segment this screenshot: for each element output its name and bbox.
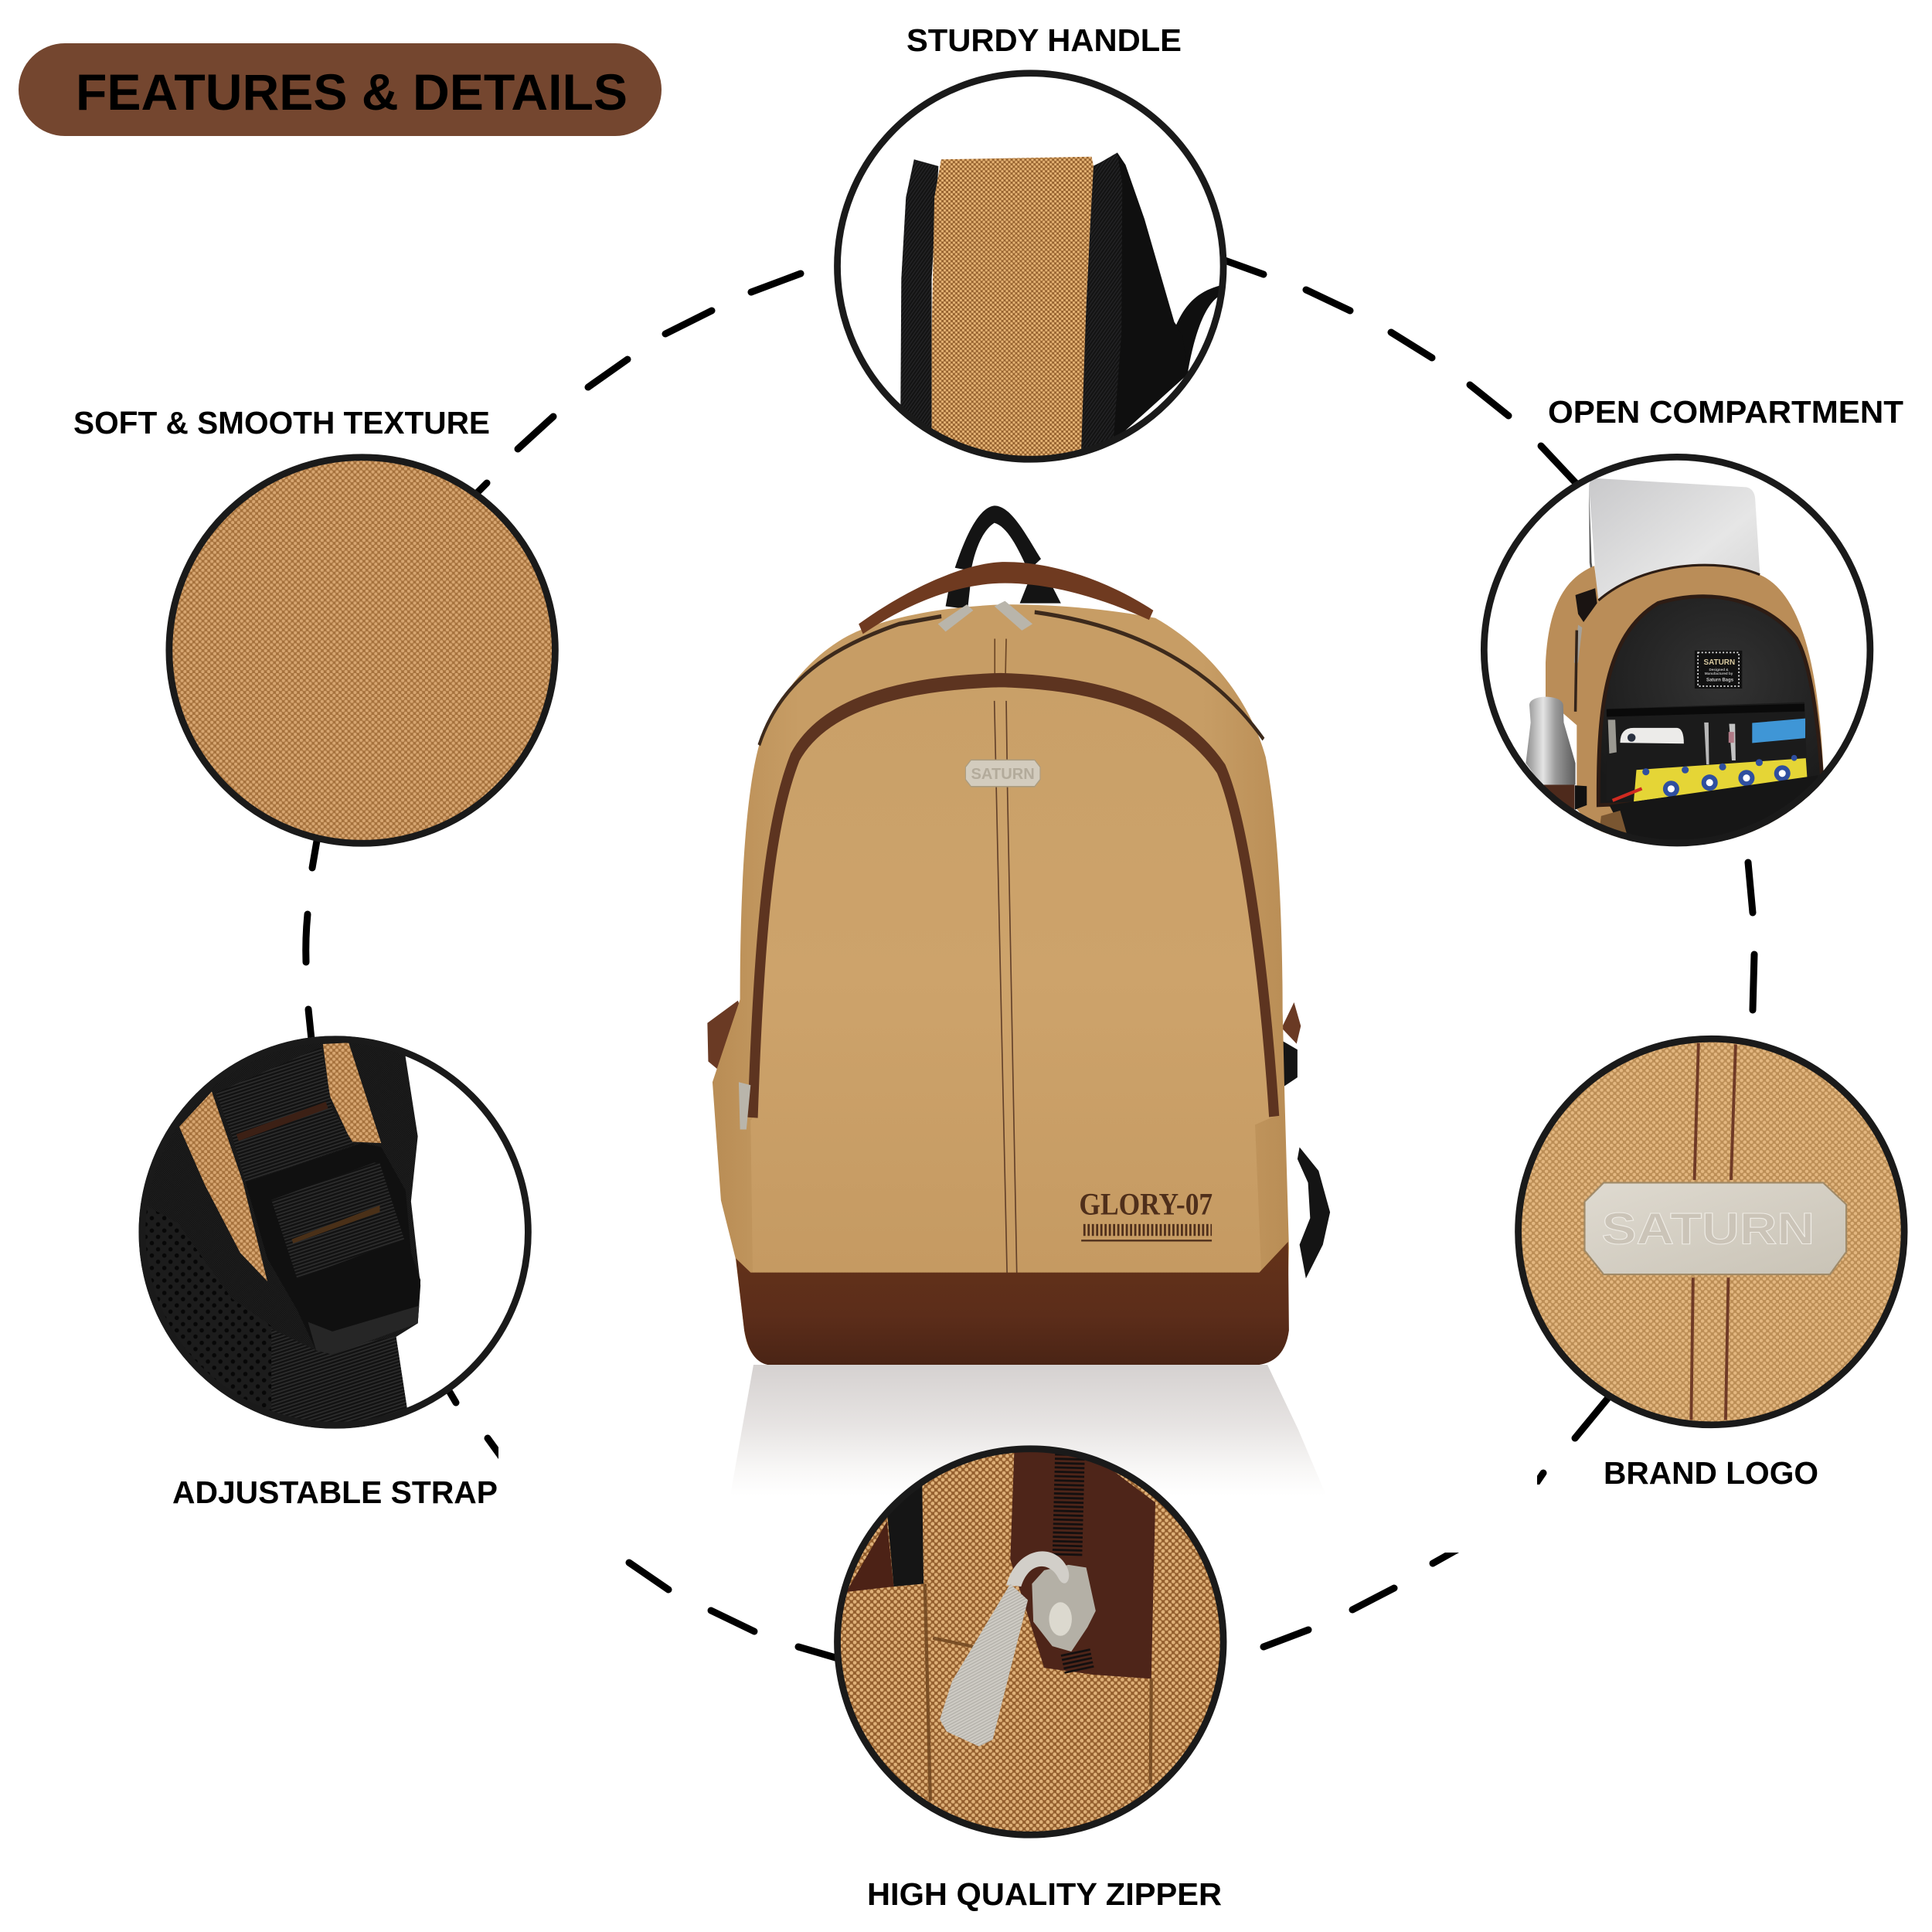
seam shadows [925, 1583, 1151, 1801]
side pocket left [707, 1001, 750, 1088]
label: adjustable strap: ADJUSTABLE STRAP [172, 1475, 498, 1510]
front panel [750, 680, 1274, 1274]
circle: high quality zipper [834, 1446, 1226, 1838]
label: sturdy handle: STURDY HANDLE [906, 22, 1182, 58]
webbing upper [216, 1047, 354, 1182]
phone [1620, 728, 1684, 743]
brand plate: SATURN [971, 764, 1035, 782]
circle: soft and smooth texture [166, 454, 559, 846]
circle: sturdy handle detail [834, 70, 1226, 463]
tan fabric edge right [323, 1043, 381, 1143]
zipper pull [1608, 719, 1617, 753]
interior brand label: Manufactured by [1705, 672, 1733, 675]
interior brand label: SATURN [1703, 658, 1735, 667]
upper rim trim [1598, 565, 1760, 600]
zipper teeth [1067, 1454, 1080, 1671]
interior brand label [1695, 651, 1742, 689]
brand plate [965, 760, 1040, 787]
icon: back strap right [1298, 1147, 1330, 1278]
label: soft and smooth texture: SOFT & SMOOTH TEXTURE [73, 405, 490, 440]
ventilated mesh [134, 1202, 271, 1434]
handle side webbing right [1080, 153, 1122, 461]
bag outer shell [1546, 565, 1824, 839]
glory-07 print: GLORY-07 [1079, 1188, 1213, 1222]
interior brand label: Saturn Bags [1706, 679, 1734, 683]
laptop [1589, 478, 1760, 599]
black strap piece [887, 1484, 923, 1587]
plate lettering: SATURN [1602, 1204, 1815, 1253]
handle side webbing left [900, 159, 938, 447]
top zipper seam [759, 612, 1264, 745]
interior lining [1598, 597, 1822, 805]
side zipper pull [1574, 625, 1582, 663]
zipper pull tab [940, 1583, 1028, 1747]
yellow pencil case [1634, 755, 1807, 801]
central backpack product illustration [707, 505, 1330, 1365]
circle: brand logo [1515, 1036, 1907, 1428]
title text: FEATURES & DETAILS [76, 63, 628, 121]
brown stitching [237, 1105, 327, 1138]
stitching [1691, 1043, 1736, 1420]
handle rear panel [1093, 153, 1189, 457]
blue box [1752, 719, 1805, 743]
panel zipper piping [753, 680, 1274, 1117]
lower gusset [1598, 811, 1628, 839]
small strap loop [1176, 286, 1219, 371]
product floor reflection [730, 1365, 1326, 1495]
label: brand logo: BRAND LOGO [1604, 1455, 1818, 1491]
metal plate [1585, 1182, 1846, 1274]
handle fabric strip [932, 157, 1094, 463]
zipper slider [1006, 1551, 1096, 1651]
label: open compartment: OPEN COMPARTMENT [1548, 394, 1903, 430]
dashed connector ring [306, 260, 1754, 1659]
padded black strap [139, 1036, 420, 1428]
zipper pulls [938, 601, 1032, 631]
pens [1704, 723, 1736, 764]
top carry loop [946, 505, 1061, 609]
inner organiser pocket [1634, 702, 1805, 765]
side opening [1576, 588, 1597, 622]
leather corner [1542, 785, 1575, 812]
side pocket right [1275, 1002, 1301, 1094]
interior brand label: Designed & [1709, 668, 1729, 672]
circle: open compartment [1481, 454, 1873, 846]
top carry handle [859, 562, 1153, 634]
red ribbon [1613, 788, 1642, 801]
bag body [713, 604, 1289, 1364]
leather base [736, 1242, 1289, 1365]
zipper tape [1010, 1448, 1155, 1679]
webbing lower [271, 1328, 407, 1434]
leather piece [846, 1522, 893, 1592]
title pill [19, 43, 662, 136]
steel bottle [1526, 697, 1576, 785]
side zipper pull [739, 1082, 750, 1130]
organiser zipper [1607, 708, 1804, 713]
circle: adjustable strap [138, 1036, 532, 1429]
label: high quality zipper: HIGH QUALITY ZIPPER [867, 1876, 1222, 1912]
plastic buckle [246, 1143, 420, 1355]
centre seam stitching [995, 701, 1017, 1274]
tan fabric edge left [179, 1091, 267, 1281]
front flap [1609, 775, 1818, 842]
upper stitch lines [995, 639, 1006, 679]
